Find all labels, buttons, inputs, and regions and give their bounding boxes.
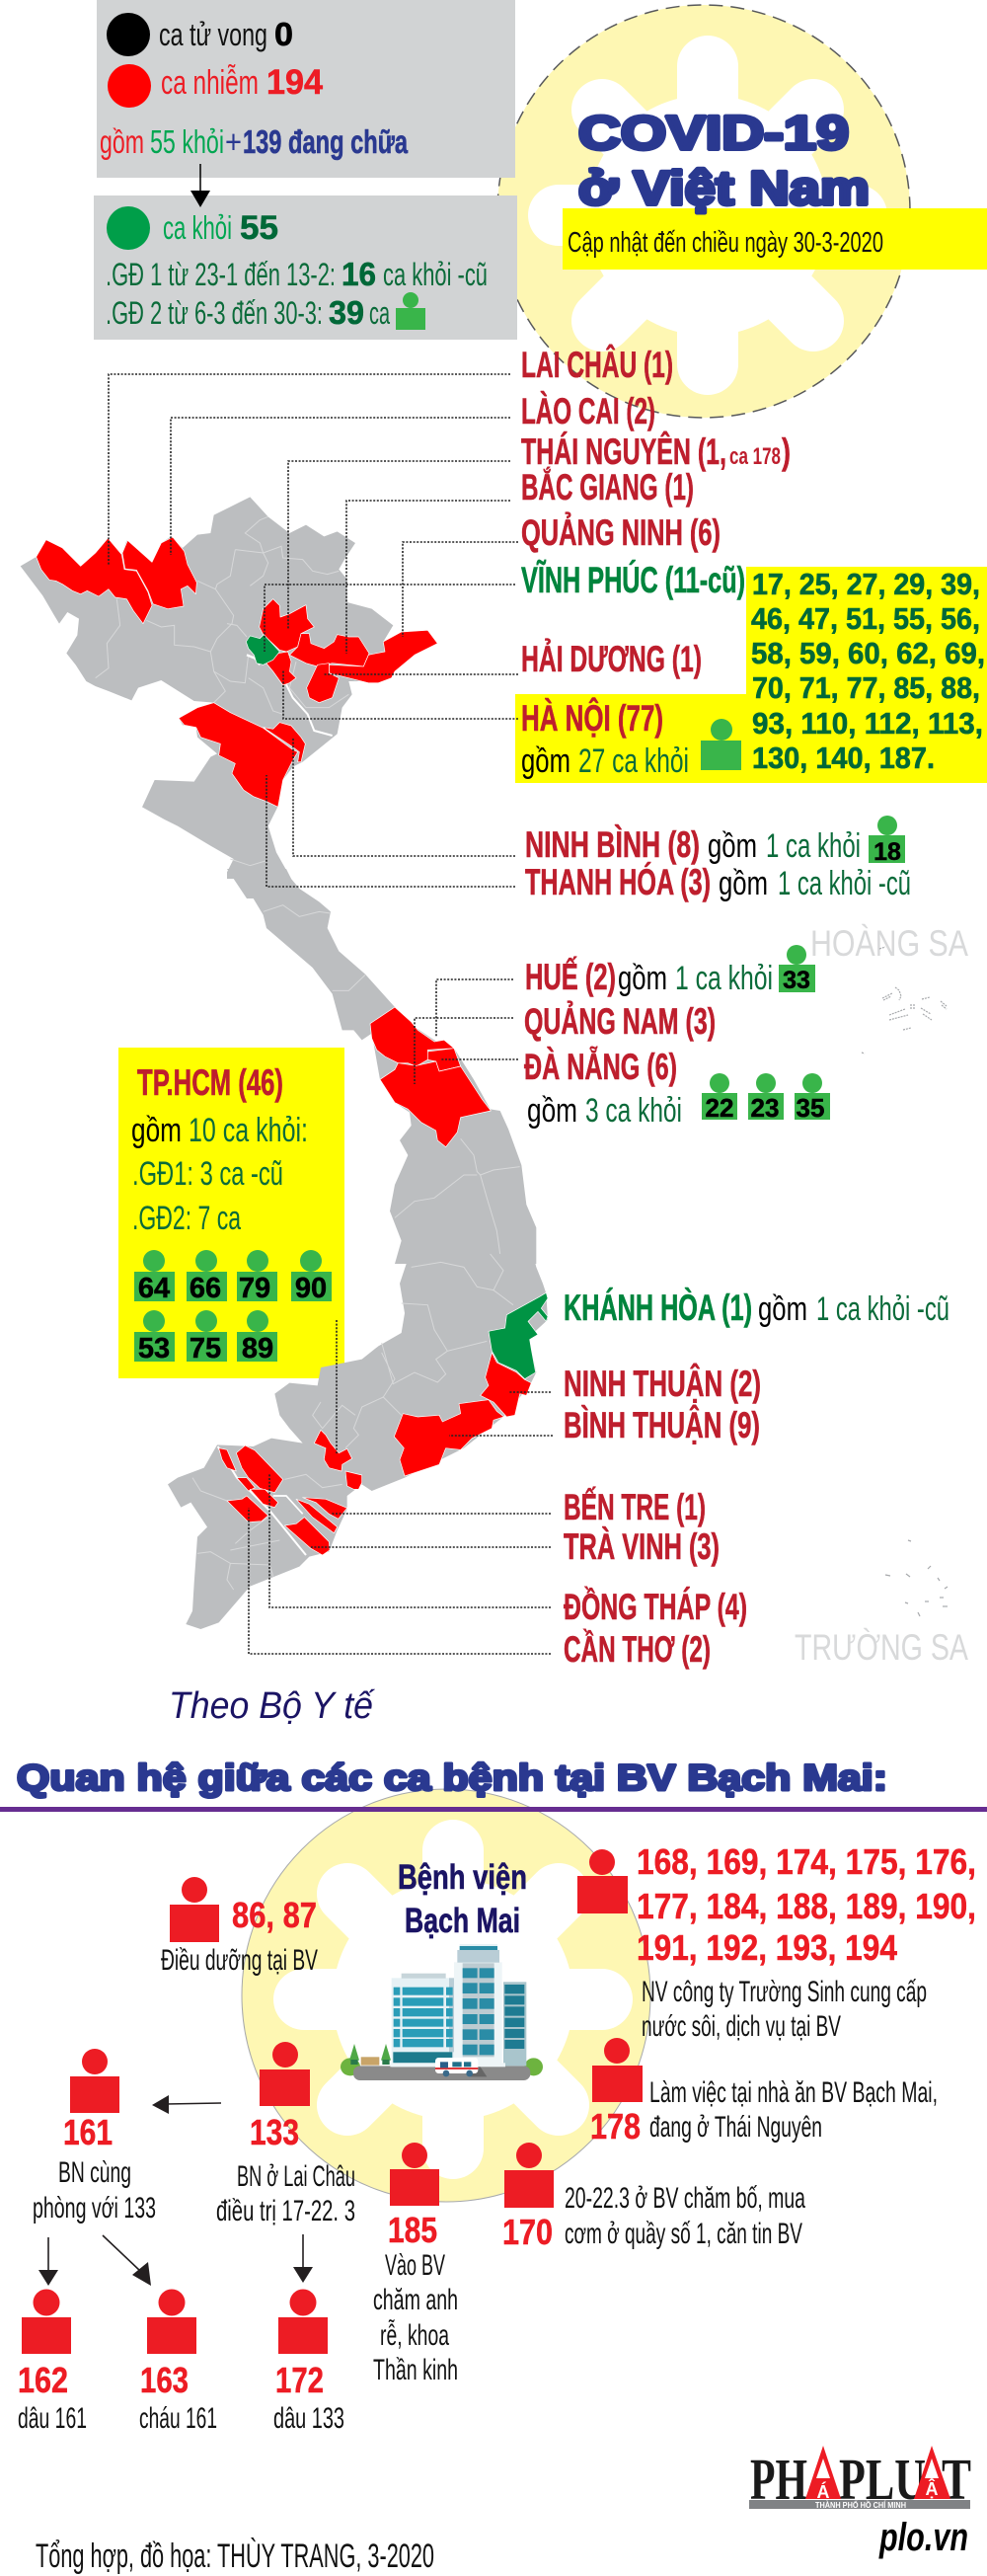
icons: patients 22 23 35: 23 xyxy=(751,1093,779,1123)
recovered count: 55 xyxy=(240,209,278,247)
case 133 xyxy=(216,2042,355,2227)
province labels: south: BÌNH THUẬN (9) xyxy=(564,1404,760,1445)
yellow panel: Ha Noi case list xyxy=(515,567,987,783)
arrow: 161 to 162 xyxy=(38,2237,58,2286)
case 185: 185 xyxy=(388,2210,437,2250)
Hue label xyxy=(525,945,815,997)
case 133: 133 xyxy=(250,2112,299,2152)
province labels: north: ) xyxy=(782,431,791,472)
case 170: 20-22.3 ở BV chăm bố, mua xyxy=(565,2182,805,2215)
TP.HCM recovered patients: 90 xyxy=(295,1273,327,1304)
icon: black dot xyxy=(107,13,150,56)
date bar xyxy=(563,208,987,270)
case 178: đang ở Thái Nguyên xyxy=(649,2111,822,2144)
Da Nang label: gồm xyxy=(527,1092,577,1130)
icon: red person xyxy=(147,2289,196,2354)
logo: Phap Luat xyxy=(749,2446,971,2512)
deaths count: ca tử vong xyxy=(159,17,267,52)
hospital name: Bệnh viện xyxy=(398,1858,527,1897)
Thanh Hoa label: THANH HÓA (3) xyxy=(525,861,711,902)
Ha Noi recovered xyxy=(521,719,741,780)
province labels: north: QUẢNG NINH (6) xyxy=(521,512,721,553)
Ha Noi recovered: gồm xyxy=(521,742,570,780)
TP.HCM phase lines xyxy=(132,1155,283,1237)
Thanh Hoa label: 1 ca khỏi -cũ xyxy=(778,865,911,902)
TP.HCM heading: TP.HCM (46) xyxy=(137,1062,283,1103)
phase 1 line: ca khỏi -cũ xyxy=(383,257,488,292)
province labels: south: TRÀ VINH (3) xyxy=(564,1526,720,1567)
case 185: Vào BV xyxy=(385,2249,445,2282)
case 163 xyxy=(139,2289,217,2435)
yellow panel: TP.HCM xyxy=(118,1048,344,1378)
province labels: north: VĨNH PHÚC (11-cũ) xyxy=(521,559,745,600)
case 161: 161 xyxy=(63,2112,113,2152)
phase 2 line: .GĐ 2 từ 6-3 đến 30-3: xyxy=(106,295,323,331)
case 161: BN cùng xyxy=(58,2156,131,2189)
province labels: north xyxy=(521,344,791,739)
infections count: 194 xyxy=(266,63,324,102)
breakdown line: 55 khỏi xyxy=(150,123,224,160)
Khanh Hoa label: KHÁNH HÒA (1) xyxy=(564,1287,752,1328)
TP.HCM recovered: gồm xyxy=(131,1112,182,1149)
case 178 xyxy=(590,2038,938,2147)
case 172: 172 xyxy=(275,2360,324,2400)
Thanh Hoa label xyxy=(525,861,911,902)
icon: red person xyxy=(260,2042,310,2106)
icons: patients 22 23 35: 22 xyxy=(706,1093,733,1123)
leader lines xyxy=(109,374,553,1654)
TP.HCM recovered patients: 66 xyxy=(190,1273,221,1304)
recovered count: ca khỏi xyxy=(163,209,232,246)
Truong Sinh company cases xyxy=(577,1841,976,2043)
icon: red person xyxy=(22,2289,71,2354)
Quang Nam label: QUẢNG NAM (3) xyxy=(524,1001,716,1042)
breakdown line: gồm xyxy=(100,123,144,160)
icon: green dot xyxy=(107,206,150,250)
province labels: north: LAI CHÂU (1) xyxy=(521,344,673,385)
title virus circle background xyxy=(497,5,910,418)
case 185 xyxy=(373,2143,458,2386)
icon: red person xyxy=(504,2143,554,2208)
cases 86, 87 xyxy=(161,1877,318,1977)
icon: patient 33: 33 xyxy=(783,967,810,994)
arrow: 133 to 172 xyxy=(293,2234,313,2283)
Ha Noi recovered: 27 ca khỏi xyxy=(578,742,689,780)
case 161: phòng với 133 xyxy=(33,2192,156,2225)
icon: green person xyxy=(396,292,425,330)
province labels: north: HÀ NỘI (77) xyxy=(521,697,663,739)
icon: red person xyxy=(592,2038,643,2102)
icon: red person xyxy=(577,1849,628,1913)
map: central section xyxy=(227,869,536,1264)
arrow: 161 to 163 xyxy=(103,2235,151,2286)
phase 1 line: 16 xyxy=(342,256,376,292)
province labels: south: BẾN TRE (1) xyxy=(564,1487,706,1527)
TP.HCM recovered patients: 89 xyxy=(242,1333,273,1365)
icon: red dot xyxy=(108,64,151,108)
province labels: south: CẦN THƠ (2) xyxy=(564,1629,711,1670)
source note: Theo Bộ Y tế xyxy=(169,1685,376,1727)
hospital virus circle background xyxy=(242,1789,650,2202)
Hue label: 1 ca khỏi xyxy=(675,960,773,997)
icons: patients 22 23 35: 35 xyxy=(797,1093,824,1123)
case 163: cháu 161 xyxy=(139,2402,217,2435)
Khanh Hoa label xyxy=(564,1287,949,1328)
phase 2 line: ca xyxy=(369,295,390,331)
title xyxy=(578,108,870,215)
icon: patient 18: 18 xyxy=(873,838,901,866)
icon: red person xyxy=(278,2289,328,2354)
case 161 xyxy=(33,2049,156,2225)
province labels: north: LÀO CAI (2) xyxy=(521,391,655,431)
panel: national totals xyxy=(97,0,515,178)
case 170 xyxy=(502,2143,805,2252)
icon: hospital building xyxy=(341,1944,543,2080)
cases 86, 87: Điều dưỡng tại BV xyxy=(161,1944,318,1977)
Ninh Binh label xyxy=(525,816,905,866)
hospital name: Bạch Mai xyxy=(405,1902,520,1940)
logo: Phap Luat: T xyxy=(942,2447,971,2512)
province labels: north: BẮC GIANG (1) xyxy=(521,466,694,507)
panel: recovered xyxy=(94,195,517,340)
case 185: chăm anh xyxy=(373,2284,458,2316)
TP.HCM phase lines: .GĐ2: 7 ca xyxy=(132,1200,241,1237)
Ha Noi case numbers: 130, 140, 187. xyxy=(752,741,935,775)
phase 1 line: .GĐ 1 từ 23-1 đến 13-2: xyxy=(106,257,336,292)
icons: patients 22 23 35 xyxy=(702,1073,830,1123)
case 163: 163 xyxy=(140,2360,189,2400)
Hoang Sa islands xyxy=(810,923,968,1054)
arrow: totals to recovered xyxy=(190,164,210,207)
case 172 xyxy=(273,2289,344,2435)
icon: red person xyxy=(70,2049,119,2113)
Da Nang label: 3 ca khỏi xyxy=(585,1092,682,1130)
TP.HCM recovered patients: 75 xyxy=(190,1333,221,1365)
phase 2 line: 39 xyxy=(329,294,364,331)
Ha Noi case numbers: 93, 110, 112, 113, xyxy=(752,706,983,741)
map: southern section xyxy=(168,1254,548,1629)
arrow: 133 to 161 xyxy=(152,2095,221,2114)
case 162: dâu 161 xyxy=(18,2402,87,2435)
section heading: Quan hệ giữa các ca bệnh tại BV Bạch Mai: xyxy=(17,1757,887,1798)
cases 86, 87: 86, 87 xyxy=(232,1895,317,1935)
Truong Sinh company cases: nước sôi, dịch vụ tại BV xyxy=(642,2010,841,2043)
breakdown line: 139 đang chữa xyxy=(243,123,408,160)
Truong Sa islands xyxy=(795,1540,968,1668)
logo: Phap Luat: PH xyxy=(750,2447,807,2512)
icon: patient 18 xyxy=(869,816,905,866)
TP.HCM recovered patients: 53 xyxy=(138,1333,170,1365)
icon: patient 33 xyxy=(779,945,815,994)
TP.HCM recovered: 10 ca khỏi: xyxy=(189,1112,308,1149)
case 178: 178 xyxy=(590,2106,641,2147)
case 170: 170 xyxy=(502,2212,553,2252)
icon: red person xyxy=(390,2143,439,2206)
title: COVID-19 xyxy=(578,108,849,160)
icon: red person xyxy=(170,1877,219,1942)
credit line: Tổng hợp, đồ họa: THÙY TRANG, 3-2020 xyxy=(36,2537,434,2575)
Ninh Binh label: 1 ca khỏi xyxy=(766,827,861,865)
deaths count: 0 xyxy=(274,16,293,52)
province labels: north: THÁI NGUYÊN (1, xyxy=(521,430,726,472)
province labels: south: ĐỒNG THÁP (4) xyxy=(564,1586,747,1627)
province labels: south: NINH THUẬN (2) xyxy=(564,1363,761,1404)
Truong Sinh company cases: 191, 192, 193, 194 xyxy=(637,1927,897,1968)
hospital name xyxy=(398,1858,527,1940)
infections count: ca nhiễm xyxy=(161,64,259,102)
TP.HCM recovered patients xyxy=(134,1250,332,1365)
Ha Noi case numbers xyxy=(751,567,985,775)
Da Nang label: ĐÀ NẴNG (6) xyxy=(524,1047,677,1087)
logo: Phap Luat: Á xyxy=(817,2481,829,2502)
Ninh Binh label: NINH BÌNH (8) xyxy=(525,824,700,865)
province labels: north: HẢI DƯƠNG (1) xyxy=(521,639,702,679)
case 172: dâu 133 xyxy=(273,2402,344,2435)
case 185: Thần kinh xyxy=(373,2354,458,2386)
breakdown line: + xyxy=(225,123,242,160)
Da Nang label xyxy=(524,1047,830,1130)
case 162 xyxy=(18,2289,87,2435)
case 133: BN ở Lai Châu xyxy=(237,2160,355,2193)
breakdown line xyxy=(100,123,408,160)
province labels: north: ca 178 xyxy=(729,443,781,470)
Thanh Hoa label: gồm xyxy=(719,865,768,902)
TP.HCM phase lines: .GĐ1: 3 ca -cũ xyxy=(132,1155,283,1193)
province labels: south xyxy=(564,1363,761,1670)
map of Vietnam xyxy=(21,497,548,1629)
case 162: 162 xyxy=(18,2360,68,2400)
title: ở Việt Nam xyxy=(578,163,870,215)
logo: Phap Luat: Ậ xyxy=(926,2478,938,2499)
TP.HCM recovered patients: 64 xyxy=(138,1273,170,1304)
Hue label: gồm xyxy=(618,960,667,997)
map: northern section xyxy=(21,497,437,879)
Hue label: HUẾ (2) xyxy=(525,957,616,997)
TP.HCM recovered patients: 79 xyxy=(239,1273,270,1304)
case 170: cơm ở quầy số 1, căn tin BV xyxy=(565,2218,802,2250)
Ninh Binh label: gồm xyxy=(708,827,757,865)
logo: Phap Luat: PLU xyxy=(839,2447,926,2512)
TP.HCM recovered xyxy=(131,1112,308,1149)
Khanh Hoa label: gồm xyxy=(758,1290,807,1328)
case 185: rễ, khoa xyxy=(380,2319,449,2352)
icon: green person xyxy=(701,719,741,770)
case 133: điều trị 17-22. 3 xyxy=(216,2195,355,2227)
logo: Phap Luat: THÀNH PHỐ HỒ CHÍ MINH xyxy=(815,2500,906,2510)
